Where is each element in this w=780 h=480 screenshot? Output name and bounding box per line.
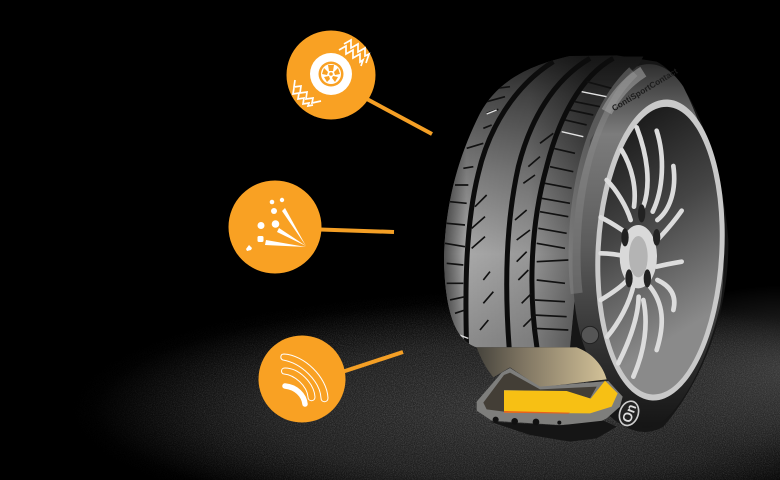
cut tread profile bbox=[477, 368, 623, 425]
tire cross-section bbox=[477, 347, 623, 442]
orange belt edge bbox=[504, 411, 570, 414]
tread base bbox=[490, 421, 617, 442]
sidewall logo: On bbox=[619, 402, 639, 425]
wheel rim bbox=[588, 96, 732, 404]
sidewall logo bbox=[615, 397, 643, 429]
tire body and tread bbox=[440, 53, 728, 432]
line 2 bbox=[320, 230, 394, 232]
ground bbox=[102, 297, 780, 480]
spokes bbox=[601, 127, 682, 377]
icon: noise waves bbox=[258, 336, 346, 422]
icon: wheel on rough road bbox=[286, 30, 376, 120]
line 3 bbox=[342, 352, 403, 372]
tread sipes bbox=[445, 82, 612, 330]
yellow belt bbox=[504, 381, 618, 413]
sidewall brand text: ContiSportContact bbox=[610, 66, 680, 113]
tire bbox=[440, 53, 732, 442]
sidewall bbox=[573, 64, 724, 429]
icon: debris spray bbox=[228, 180, 322, 274]
bolt holes bbox=[621, 204, 660, 287]
circumferential grooves bbox=[466, 58, 613, 350]
inner cavity bbox=[477, 347, 607, 387]
sidewall medallion bbox=[581, 326, 599, 344]
groove notches bbox=[493, 417, 561, 425]
line 1 bbox=[365, 98, 432, 134]
hub bbox=[620, 225, 657, 288]
callout lines bbox=[320, 98, 432, 372]
